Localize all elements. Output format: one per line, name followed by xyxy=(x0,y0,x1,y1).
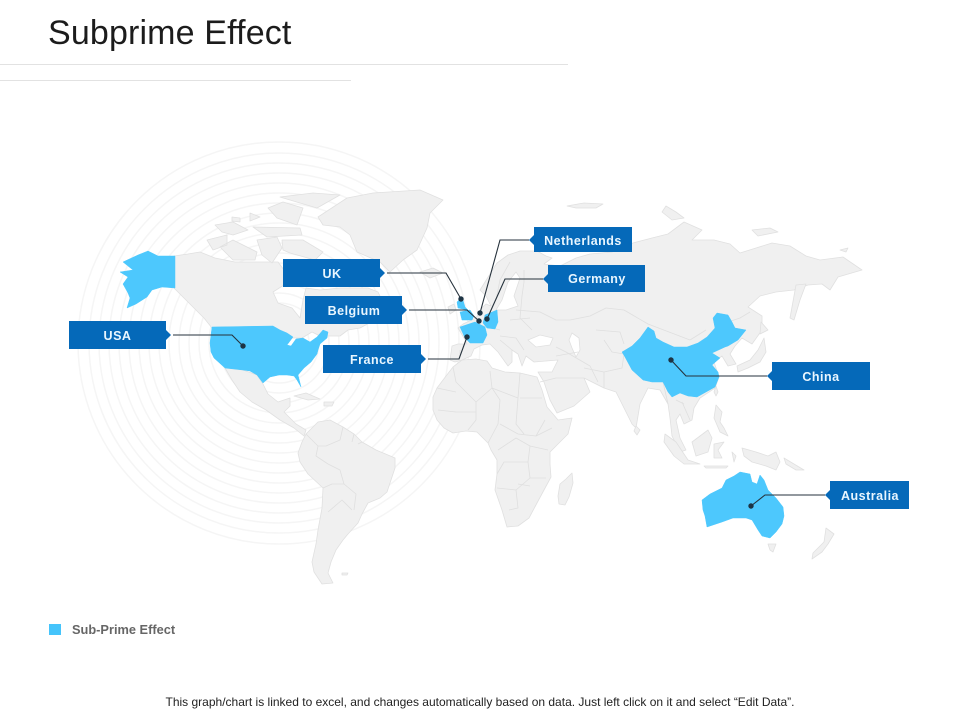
label: Netherlands xyxy=(477,227,632,316)
USA: mainland xyxy=(210,326,328,387)
Tasmania xyxy=(768,544,776,552)
Greenland xyxy=(318,190,443,272)
France xyxy=(460,322,487,343)
South America xyxy=(298,420,395,584)
label: France: France xyxy=(350,353,394,367)
Mexico and Central America xyxy=(225,368,306,436)
USA: Alaska xyxy=(120,251,175,308)
Canada xyxy=(174,252,380,338)
label: UK: UK xyxy=(322,267,342,281)
China xyxy=(622,313,746,397)
Australia xyxy=(702,472,784,538)
label: Belgium: Belgium xyxy=(328,304,380,318)
label: Australia xyxy=(748,481,909,509)
highlighted countries xyxy=(120,251,784,538)
label: UK xyxy=(283,259,464,302)
label: USA xyxy=(69,321,246,349)
Germany xyxy=(483,310,498,329)
New Guinea xyxy=(742,448,804,470)
Philippines xyxy=(714,405,728,436)
Taiwan xyxy=(714,386,718,396)
Cuba and Caribbean islands xyxy=(294,393,334,406)
label: China: China xyxy=(802,370,840,384)
Sulawesi and small Indonesian islands xyxy=(704,442,736,468)
title: Subprime Effect xyxy=(48,14,292,52)
label: USA: USA xyxy=(104,329,131,343)
label: Germany: Germany xyxy=(568,272,626,286)
legend: Sub-Prime Effect xyxy=(72,622,175,637)
label: Australia: Australia xyxy=(841,489,900,503)
Japan xyxy=(737,322,768,372)
British and Irish isles xyxy=(448,304,456,314)
grey landmasses xyxy=(174,190,862,584)
label: China xyxy=(668,357,870,390)
Sri Lanka xyxy=(634,426,640,435)
label: France xyxy=(323,334,470,373)
footer note: This graph/chart is linked to excel, and changes automatically based on data. Just left click on it and select “Edit Data”. xyxy=(166,695,794,709)
Iceland xyxy=(420,268,443,278)
Africa xyxy=(433,359,572,527)
Eurasian borders xyxy=(460,262,750,420)
Canadian arctic islands xyxy=(207,193,340,263)
Netherlands and Belgium xyxy=(460,310,474,320)
New Zealand xyxy=(812,528,834,559)
Falkland islands xyxy=(342,573,348,575)
Arctic Russian islands xyxy=(567,203,848,252)
Madagascar xyxy=(558,473,573,505)
Borneo xyxy=(692,430,712,456)
UK xyxy=(457,297,468,310)
Sakhalin xyxy=(790,284,806,320)
inland seas xyxy=(496,272,580,357)
label: Belgium xyxy=(305,296,482,324)
Sumatra and Java xyxy=(664,434,700,464)
concentric background rings xyxy=(78,142,480,544)
label: Netherlands: Netherlands xyxy=(544,234,622,248)
Eurasia xyxy=(450,222,862,452)
label: Germany xyxy=(484,265,645,322)
